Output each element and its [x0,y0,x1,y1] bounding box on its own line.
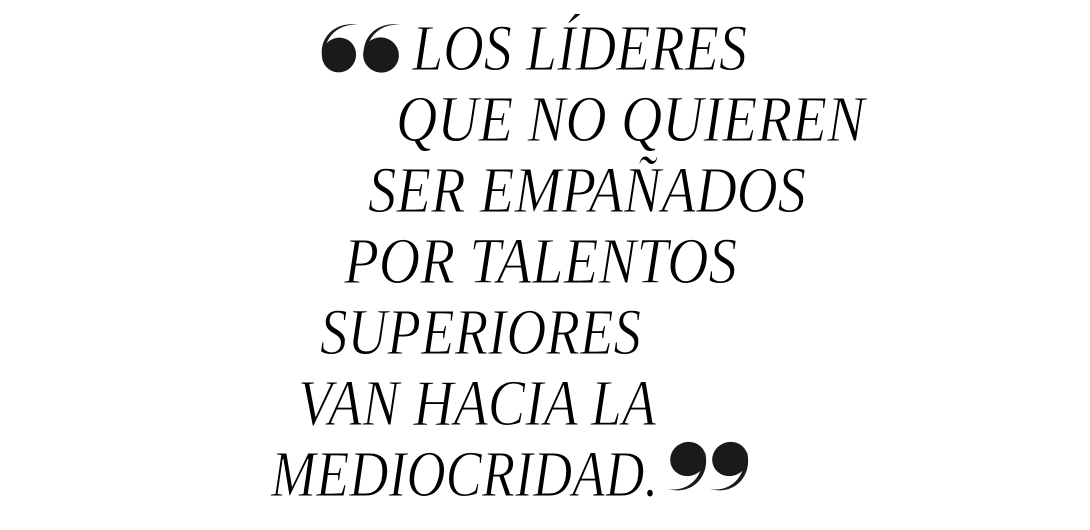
text: SER EMPAÑADOS: SER EMPAÑADOS [368,154,806,227]
text: POR TALENTOS: POR TALENTOS [343,225,737,298]
text: QUE NO QUIEREN: QUE NO QUIEREN [396,83,868,156]
text: MEDIOCRIDAD.: MEDIOCRIDAD. [270,438,658,511]
text: SUPERIORES: SUPERIORES [320,296,641,369]
text: LOS LÍDERES: LOS LÍDERES [411,12,747,85]
text: VAN HACIA LA: VAN HACIA LA [298,367,657,440]
icon: opening quotation marks [316,24,405,78]
icon: closing quotation marks [665,436,753,490]
